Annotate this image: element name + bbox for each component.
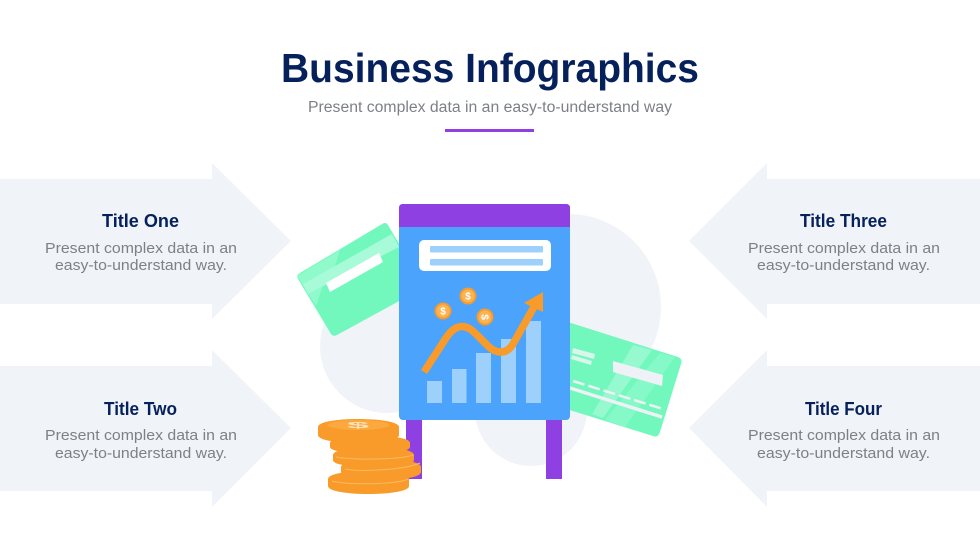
board header	[399, 204, 570, 227]
dollar coins: $	[440, 306, 446, 318]
arrow panel: title two: Title Two	[104, 399, 177, 419]
white label	[419, 240, 551, 271]
arrow panel: title four	[689, 350, 980, 507]
dollar coins: $	[465, 292, 471, 302]
subtitle: Present complex data in an easy-to-understand way	[308, 99, 672, 116]
arrow panel: title four: Present complex data in an	[748, 427, 940, 444]
arrow panel: title four: easy-to-understand way.	[757, 445, 930, 462]
arrow panel: title three: Present complex data in an	[748, 240, 940, 257]
arrow panel: title three: Title Three	[800, 211, 887, 231]
arrow panel: title one: Title One	[102, 211, 179, 231]
arrow panel: title one	[0, 163, 291, 319]
icon: coin stack	[318, 419, 421, 494]
arrow panel: title two	[0, 350, 291, 507]
arrow panel: title one: Present complex data in an	[45, 240, 237, 257]
arrow panel: title one: easy-to-understand way.	[55, 257, 227, 274]
title underline	[445, 129, 534, 132]
dollar coins	[434, 288, 494, 326]
arrow panel: title two: easy-to-understand way.	[55, 445, 227, 462]
trend arrow	[424, 292, 543, 372]
arrow panel: title four: Title Four	[805, 399, 882, 419]
arrow panel: title three: easy-to-understand way.	[757, 257, 930, 274]
icon: left credit card	[297, 223, 401, 336]
background blob	[320, 214, 661, 466]
board legs	[406, 415, 562, 479]
icon: coin stack: $	[347, 421, 372, 430]
icon: right credit card	[560, 322, 682, 436]
title: Business Infographics	[281, 45, 699, 91]
bar chart	[427, 321, 541, 403]
board body	[399, 204, 570, 420]
arrow panel: title two: Present complex data in an	[45, 427, 237, 444]
arrow panel: title three	[689, 163, 980, 319]
icon: presentation board	[399, 204, 570, 479]
dollar coins: $	[478, 314, 490, 320]
